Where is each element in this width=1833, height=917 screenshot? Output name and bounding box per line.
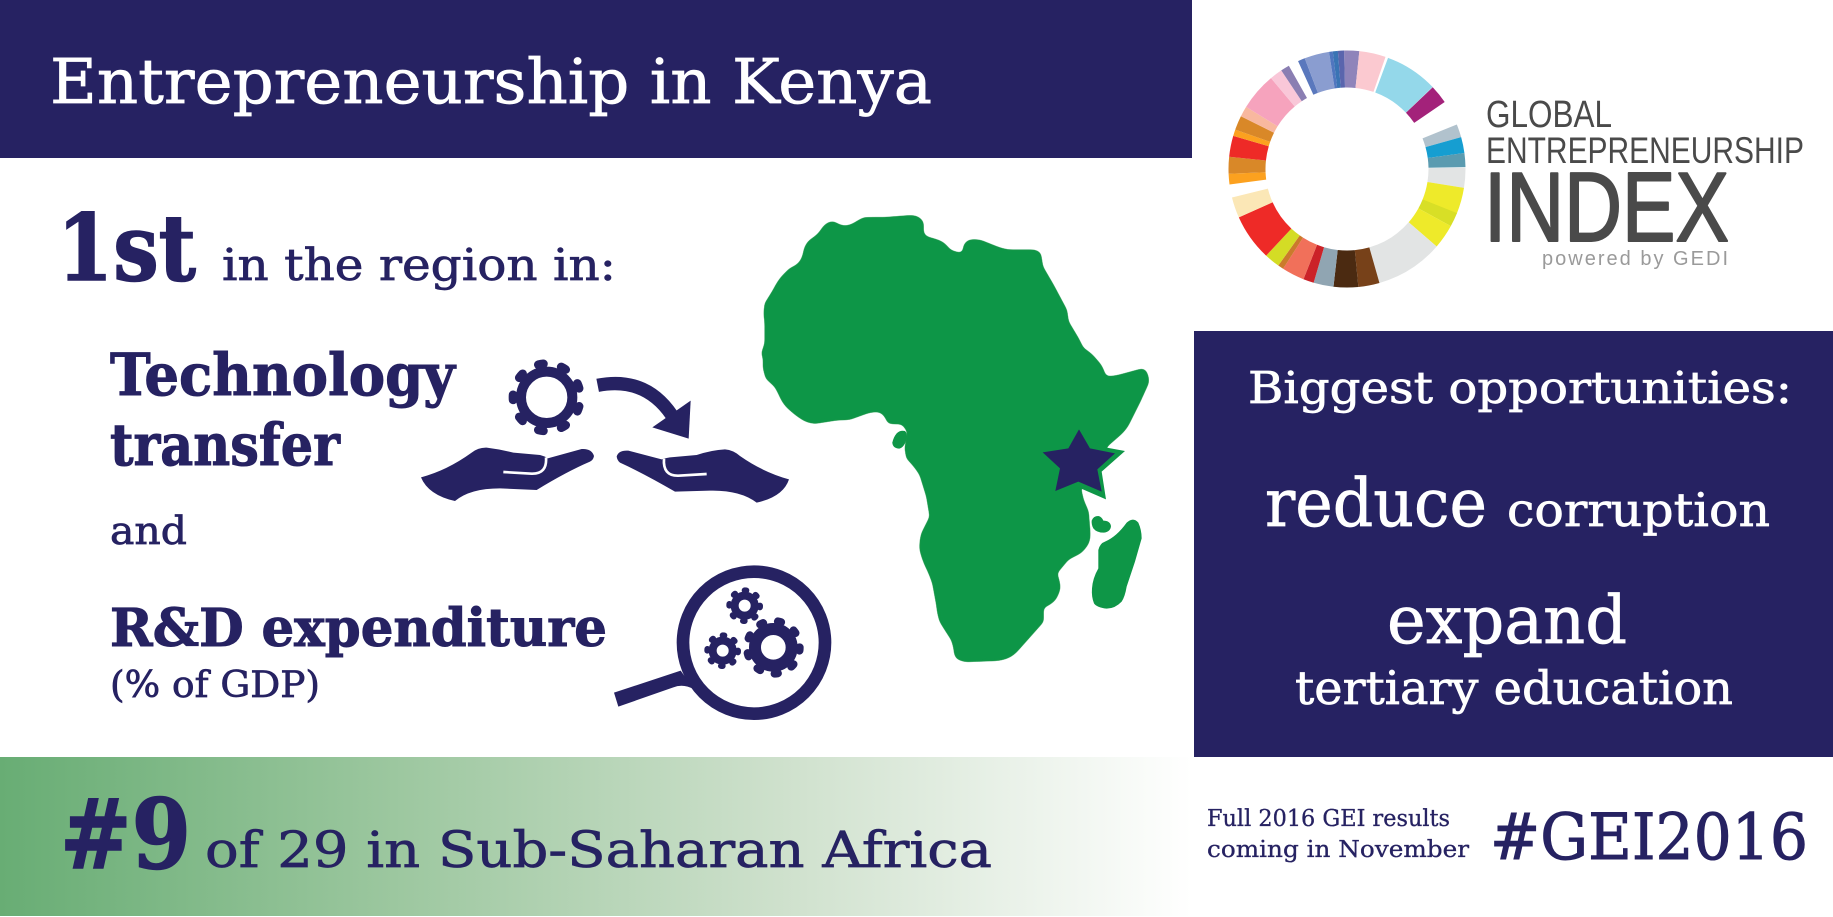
star outline — [1060, 433, 1125, 499]
note: results coming in November — [1207, 806, 1469, 863]
panel: biggest opportunities: corruption — [1507, 483, 1770, 537]
panel: biggest opportunities: reduce — [1265, 465, 1487, 542]
icon: right hand — [617, 449, 789, 503]
island: Zanzibar — [1092, 516, 1111, 533]
text: R&D expenditure: R&D expenditure — [110, 598, 607, 659]
text: Technology transfer — [110, 341, 457, 479]
text: R&D expenditure — [110, 598, 607, 706]
island: Madagascar — [1092, 520, 1142, 609]
note: results coming in November: Full 2016 GEI results — [1207, 806, 1450, 832]
icon: gears — [707, 590, 800, 674]
icon: magnifying glass with gears — [614, 572, 825, 714]
logo wordmark: GLOBAL — [1486, 94, 1612, 136]
panel: biggest opportunities: expand — [1387, 582, 1627, 659]
text: Technology transfer: Technology — [110, 341, 457, 409]
title banner — [0, 0, 1192, 158]
hashtag: #GEI2016 — [1490, 801, 1808, 875]
note: results coming in November: coming in November — [1207, 837, 1469, 863]
text: and: and — [110, 509, 187, 553]
icon: gear — [513, 364, 580, 431]
logo: Global Entrepreneurship Index — [1247, 69, 1804, 270]
icon: left hand — [421, 448, 594, 501]
banner: rank in Sub-Saharan Africa — [0, 757, 1192, 916]
panel: biggest opportunities: Biggest opportunities: — [1248, 363, 1792, 414]
donut ring — [1247, 69, 1447, 269]
continent — [762, 216, 1149, 662]
island: Bioko — [892, 431, 907, 449]
arrow — [598, 384, 691, 439]
map: Africa with Kenya star — [762, 216, 1149, 662]
text: R&D expenditure: (% of GDP) — [110, 665, 320, 706]
star: Kenya — [1043, 429, 1115, 492]
banner: rank in Sub-Saharan Africa: #9 — [60, 778, 191, 891]
heading: 1st in the region — [57, 194, 616, 302]
panel: biggest opportunities: tertiary education — [1295, 661, 1733, 715]
panel: biggest opportunities — [1194, 331, 1833, 757]
logo wordmark: powered by GEDI — [1542, 248, 1728, 270]
text: Technology transfer: transfer — [110, 411, 341, 479]
heading: 1st in the region: in the region in: — [222, 240, 616, 291]
heading: 1st in the region: 1st — [57, 194, 196, 302]
logo wordmark — [1484, 94, 1804, 270]
icon: technology transfer hands, gear and arrow — [421, 364, 789, 503]
banner: rank in Sub-Saharan Africa: of 29 in Sub-Saharan Africa — [205, 821, 992, 879]
title banner: Entrepreneurship in Kenya — [50, 45, 932, 118]
logo wordmark: INDEX — [1484, 152, 1729, 262]
